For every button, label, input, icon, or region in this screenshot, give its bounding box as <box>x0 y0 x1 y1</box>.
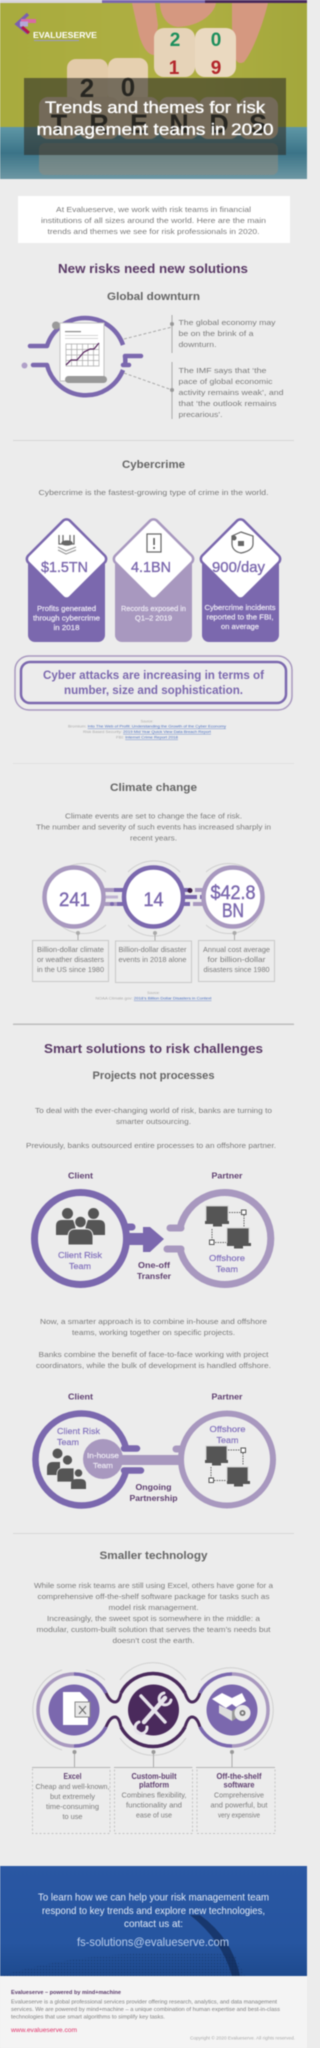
callout: number, size and sophistication. <box>64 685 243 697</box>
stat card: incidents: on average <box>221 624 259 631</box>
climate circles: 14 <box>144 890 164 911</box>
tech box: custom-built: ease of use <box>136 1810 172 1820</box>
logo <box>17 14 98 41</box>
partner circle <box>167 1192 271 1284</box>
projects intro: To deal with the ever-changing world of risk, banks are turning to <box>35 1106 272 1115</box>
dice: TRENDS: D <box>209 109 229 139</box>
dice: TRENDS: N <box>169 109 189 139</box>
technology intro <box>34 1581 274 1645</box>
client circle: Team <box>57 1437 79 1447</box>
icon: excel file <box>63 1692 90 1725</box>
intro panel: trends and themes we see for risk professionals in 2020. <box>48 227 260 236</box>
dice: 20: 0 <box>121 72 135 102</box>
icon: report in circle <box>22 318 172 395</box>
call to action banner: respond to key trends and explore new technologies, <box>42 1905 265 1917</box>
heading: cybercrime: Cybercrime <box>122 459 185 471</box>
partner circle: Team <box>216 1264 238 1274</box>
climate intro <box>36 812 271 842</box>
smarter approach text <box>36 1317 271 1370</box>
intro panel: At Evalueserve, we work with risk teams in financial <box>56 205 251 214</box>
climate box: 42.8: for billion-dollar <box>208 955 266 964</box>
dice: 2019: 1 <box>169 58 180 79</box>
climate box: 14: Billion-dollar disaster <box>118 945 187 954</box>
diagram: ongoing partnership: Client <box>68 1392 93 1402</box>
tech box: excel: to use <box>62 1812 82 1821</box>
projects intro <box>26 1106 276 1150</box>
icon: alert document <box>147 534 161 552</box>
technology intro: comprehensive off-the-shelf software package for tasks such as <box>38 1592 270 1601</box>
call to action banner: fs-solutions@evalueserve.com <box>77 1935 229 1949</box>
stat card: records: 4.1BN <box>131 559 171 576</box>
diagram: ongoing partnership <box>35 1392 273 1506</box>
stat card: profits: $1.5TN <box>41 559 88 576</box>
cybercrime intro: Cybercrime is the fastest-growing type of crime in the world. <box>38 488 268 497</box>
icon: box and disc <box>212 1693 250 1721</box>
intro panel: institutions of all sizes around the world. Here are the main <box>41 216 266 225</box>
climate box: 14: events in 2018 alone <box>118 955 186 964</box>
tech box: custom-built: platform <box>139 1780 169 1790</box>
dice: 2019: 0 <box>211 30 221 51</box>
climate circles <box>44 861 264 936</box>
partner circle <box>176 1414 273 1506</box>
bullet: IMF: activity remains weak’, and <box>178 388 284 397</box>
heading: climate change: Climate change <box>110 782 197 794</box>
sources: cybercrime: Source: <box>141 720 153 724</box>
stat card: incidents: reported to the FBI, <box>206 614 274 622</box>
footer: technologies that use smart algorithms to simplify key tasks. <box>11 2014 165 2020</box>
technology intro: doesn’t cost the earth. <box>112 1636 194 1645</box>
client circle: In-house <box>87 1451 119 1460</box>
tech box: custom-built: Combines flexibility, <box>122 1790 186 1800</box>
dice: 2019: 9 <box>211 58 221 79</box>
label: ongoing partnership: Ongoing <box>136 1483 172 1492</box>
technology intro: While some risk teams are still using Excel, others have gone for a <box>34 1581 274 1590</box>
label: ongoing partnership <box>130 1483 178 1503</box>
smarter approach text: Banks combine the benefit of face-to-face working with project <box>38 1350 268 1359</box>
source: climate: NOAA Climate.gov: 2018’s Billion Dollar Disasters in Context <box>96 996 212 1000</box>
dice: 2019 <box>154 28 236 79</box>
tech box: off-the-shelf: very expensive <box>218 1810 260 1820</box>
technology intro: model risk management. <box>108 1603 198 1612</box>
client circle <box>35 1414 141 1506</box>
heading: smart solutions: Smart solutions to risk challenges <box>44 1041 263 1056</box>
climate circles: BN <box>222 901 244 922</box>
climate box: 42.8: Annual cost average <box>203 945 270 954</box>
hand <box>132 3 268 63</box>
sources: cybercrime: FBI: Internet Crime Report 2018 <box>116 736 178 740</box>
tech box: custom-built: functionality and <box>126 1800 182 1810</box>
bullet: IMF: pace of global economic <box>178 377 273 386</box>
dice: TRENDS: T <box>51 109 68 139</box>
tech box: excel: Cheap and well-known, <box>36 1782 110 1791</box>
title overlay <box>24 78 286 155</box>
stat card: profits: Profits generated <box>37 606 96 613</box>
tech box: excel: Excel <box>64 1772 82 1781</box>
smarter approach text: Now, a smarter approach is to combine in-house and offshore <box>40 1317 267 1326</box>
bullet: economy: be on the brink of a <box>178 329 255 338</box>
title: Trends and themes for risk <box>45 98 266 117</box>
technology intro: modular, custom-built solution that serves the team’s needs but <box>36 1625 270 1634</box>
heading: projects: Projects not processes <box>92 1070 214 1082</box>
footer: Copyright © 2020 Evalueserve. All rights reserved. <box>190 2034 295 2040</box>
intro panel <box>18 196 290 243</box>
stat card: records <box>112 517 195 642</box>
label: one-off transfer: Transfer <box>137 1272 171 1281</box>
dice: TRENDS <box>39 97 278 175</box>
footer: Evalueserve is a global professional services provider offering research, analytics, and data management <box>11 2000 278 2006</box>
climate box: 241 <box>32 931 108 982</box>
tech box: excel: but extremely <box>50 1792 95 1801</box>
dice: TRENDS: S <box>249 109 267 139</box>
hero image <box>0 3 307 179</box>
stat card: profits <box>25 517 108 642</box>
stat card: records: Q1–2 2019 <box>135 616 172 622</box>
bullet: economy: The global economy may <box>178 318 276 327</box>
client circle: Client Risk <box>57 1426 101 1436</box>
climate intro: The number and severity of such events has increased sharply in <box>36 822 271 832</box>
partner circle: Offshore <box>209 1253 245 1263</box>
callout <box>15 656 292 710</box>
client circle <box>34 1192 132 1284</box>
diagram: one-off transfer: Client <box>68 1172 93 1180</box>
tech box: off-the-shelf: and powerful, but <box>210 1800 268 1810</box>
tech box: off-the-shelf: Off-the-shelf <box>216 1772 262 1781</box>
stat card: incidents: Cybercrime incidents <box>204 605 276 612</box>
footer: www.evalueserve.com <box>10 2027 77 2034</box>
bullet: IMF: precarious’. <box>178 410 222 419</box>
call to action banner <box>0 1866 307 1976</box>
label: one-off transfer: One-off <box>138 1261 170 1270</box>
heading: new risks: New risks need new solutions <box>58 261 248 276</box>
call to action banner: To learn how we can help your risk management team <box>38 1892 269 1904</box>
bullet: IMF: The IMF says that ‘the <box>178 366 266 375</box>
client circle: Team <box>93 1461 113 1470</box>
off-the-shelf ring <box>232 1674 268 1746</box>
sources: cybercrime <box>68 720 226 740</box>
label: ongoing partnership: Partnership <box>130 1494 178 1503</box>
sources: cybercrime: Risk Based Security: 2019 Mid Year Quick View Data Breach Report <box>83 730 211 734</box>
callout: Cyber attacks are increasing in terms of <box>43 670 264 682</box>
heading: smaller technology: Smaller technology <box>100 1550 208 1562</box>
excel ring <box>38 1674 74 1746</box>
climate box: 14 <box>116 931 192 982</box>
footer: services. We are powered by mind+machine – a unique combination of human expertise and best-in-class <box>11 2007 280 2013</box>
bullet: IMF: that ‘the outlook remains <box>178 399 277 408</box>
connector <box>118 1455 182 1465</box>
stat card: profits: in 2018 <box>54 625 80 632</box>
climate box: 241: or weather disasters <box>37 955 104 964</box>
logo: EVALUESERVE <box>33 31 98 40</box>
stat card: incidents <box>199 517 282 642</box>
source: climate <box>96 991 212 1000</box>
client circle: Team <box>69 1261 91 1271</box>
projects intro: smarter outsourcing. <box>116 1117 191 1126</box>
tech box: off-the-shelf: software <box>224 1780 255 1790</box>
tech box: custom-built <box>114 1750 192 1834</box>
source: climate: Source: <box>147 991 160 995</box>
title: management teams in 2020 <box>36 120 274 139</box>
arrow: one-off transfer <box>125 1227 164 1252</box>
custom ring <box>121 1673 185 1747</box>
dice: 20: 2 <box>80 73 94 103</box>
diagram: one-off transfer: Partner <box>212 1172 242 1180</box>
tech box: excel <box>32 1750 110 1834</box>
climate circles: $42.8 <box>210 883 256 904</box>
sources: cybercrime: Bromium: Into The Web of Profit: Understanding the Growth of the Cyber Economy <box>68 724 226 728</box>
partner circle: Team <box>216 1435 238 1445</box>
title <box>36 98 274 139</box>
smarter approach text: coordinators, while the bulk of development is handled offshore. <box>36 1361 271 1370</box>
tech box: custom-built: Custom-built <box>132 1772 177 1781</box>
stat card: incidents: 900/day <box>212 559 265 576</box>
bullet: IMF <box>170 362 284 419</box>
climate box: 42.8 <box>198 931 274 982</box>
heading: global downturn: Global downturn <box>107 291 200 303</box>
diagram: ongoing partnership: Partner <box>212 1392 242 1402</box>
icon: money <box>58 535 76 554</box>
climate intro: recent years. <box>130 834 177 842</box>
footer <box>0 1976 307 2048</box>
stat card: profits: through cybercrime <box>33 616 100 622</box>
client circle: Client Risk <box>58 1250 103 1260</box>
tech box: off-the-shelf <box>196 1750 275 1834</box>
dice: 20 <box>67 58 148 104</box>
smarter approach text: teams, working together on specific projects. <box>72 1328 235 1337</box>
climate box: 42.8: disasters since 1980 <box>204 965 270 974</box>
projects intro: Previously, banks outsourced entire processes to an offshore partner. <box>26 1141 276 1150</box>
tech box: off-the-shelf: Comprehensive <box>214 1790 264 1800</box>
tech box: excel: time-consuming <box>46 1802 99 1811</box>
climate box: 241: in the US since 1980 <box>37 965 104 974</box>
bullet: economy <box>170 315 276 353</box>
bullet: economy: downturn. <box>178 340 216 349</box>
technology circles <box>33 1663 273 1755</box>
call to action banner: contact us at: <box>124 1918 183 1930</box>
climate intro: Climate events are set to change the face of risk. <box>65 812 242 820</box>
dice: 2019: 2 <box>170 30 180 51</box>
top colour bar <box>0 0 307 3</box>
icon: shield lock <box>232 532 253 553</box>
icon: tools <box>135 1693 171 1734</box>
stat card: records: Records exposed in <box>121 606 186 613</box>
diagram: one-off transfer <box>34 1172 271 1284</box>
partner circle: Offshore <box>210 1424 246 1434</box>
technology intro: Increasingly, the sweet spot is somewhere in the middle: a <box>47 1614 261 1623</box>
climate box: 241: Billion-dollar climate <box>37 945 104 954</box>
footer: Evalueserve – powered by mind+machine <box>11 1990 122 1996</box>
dice: TRENDS: E <box>130 109 148 139</box>
climate circles: 241 <box>59 890 90 911</box>
label: one-off transfer <box>137 1261 171 1281</box>
dice: TRENDS: R <box>89 109 109 139</box>
